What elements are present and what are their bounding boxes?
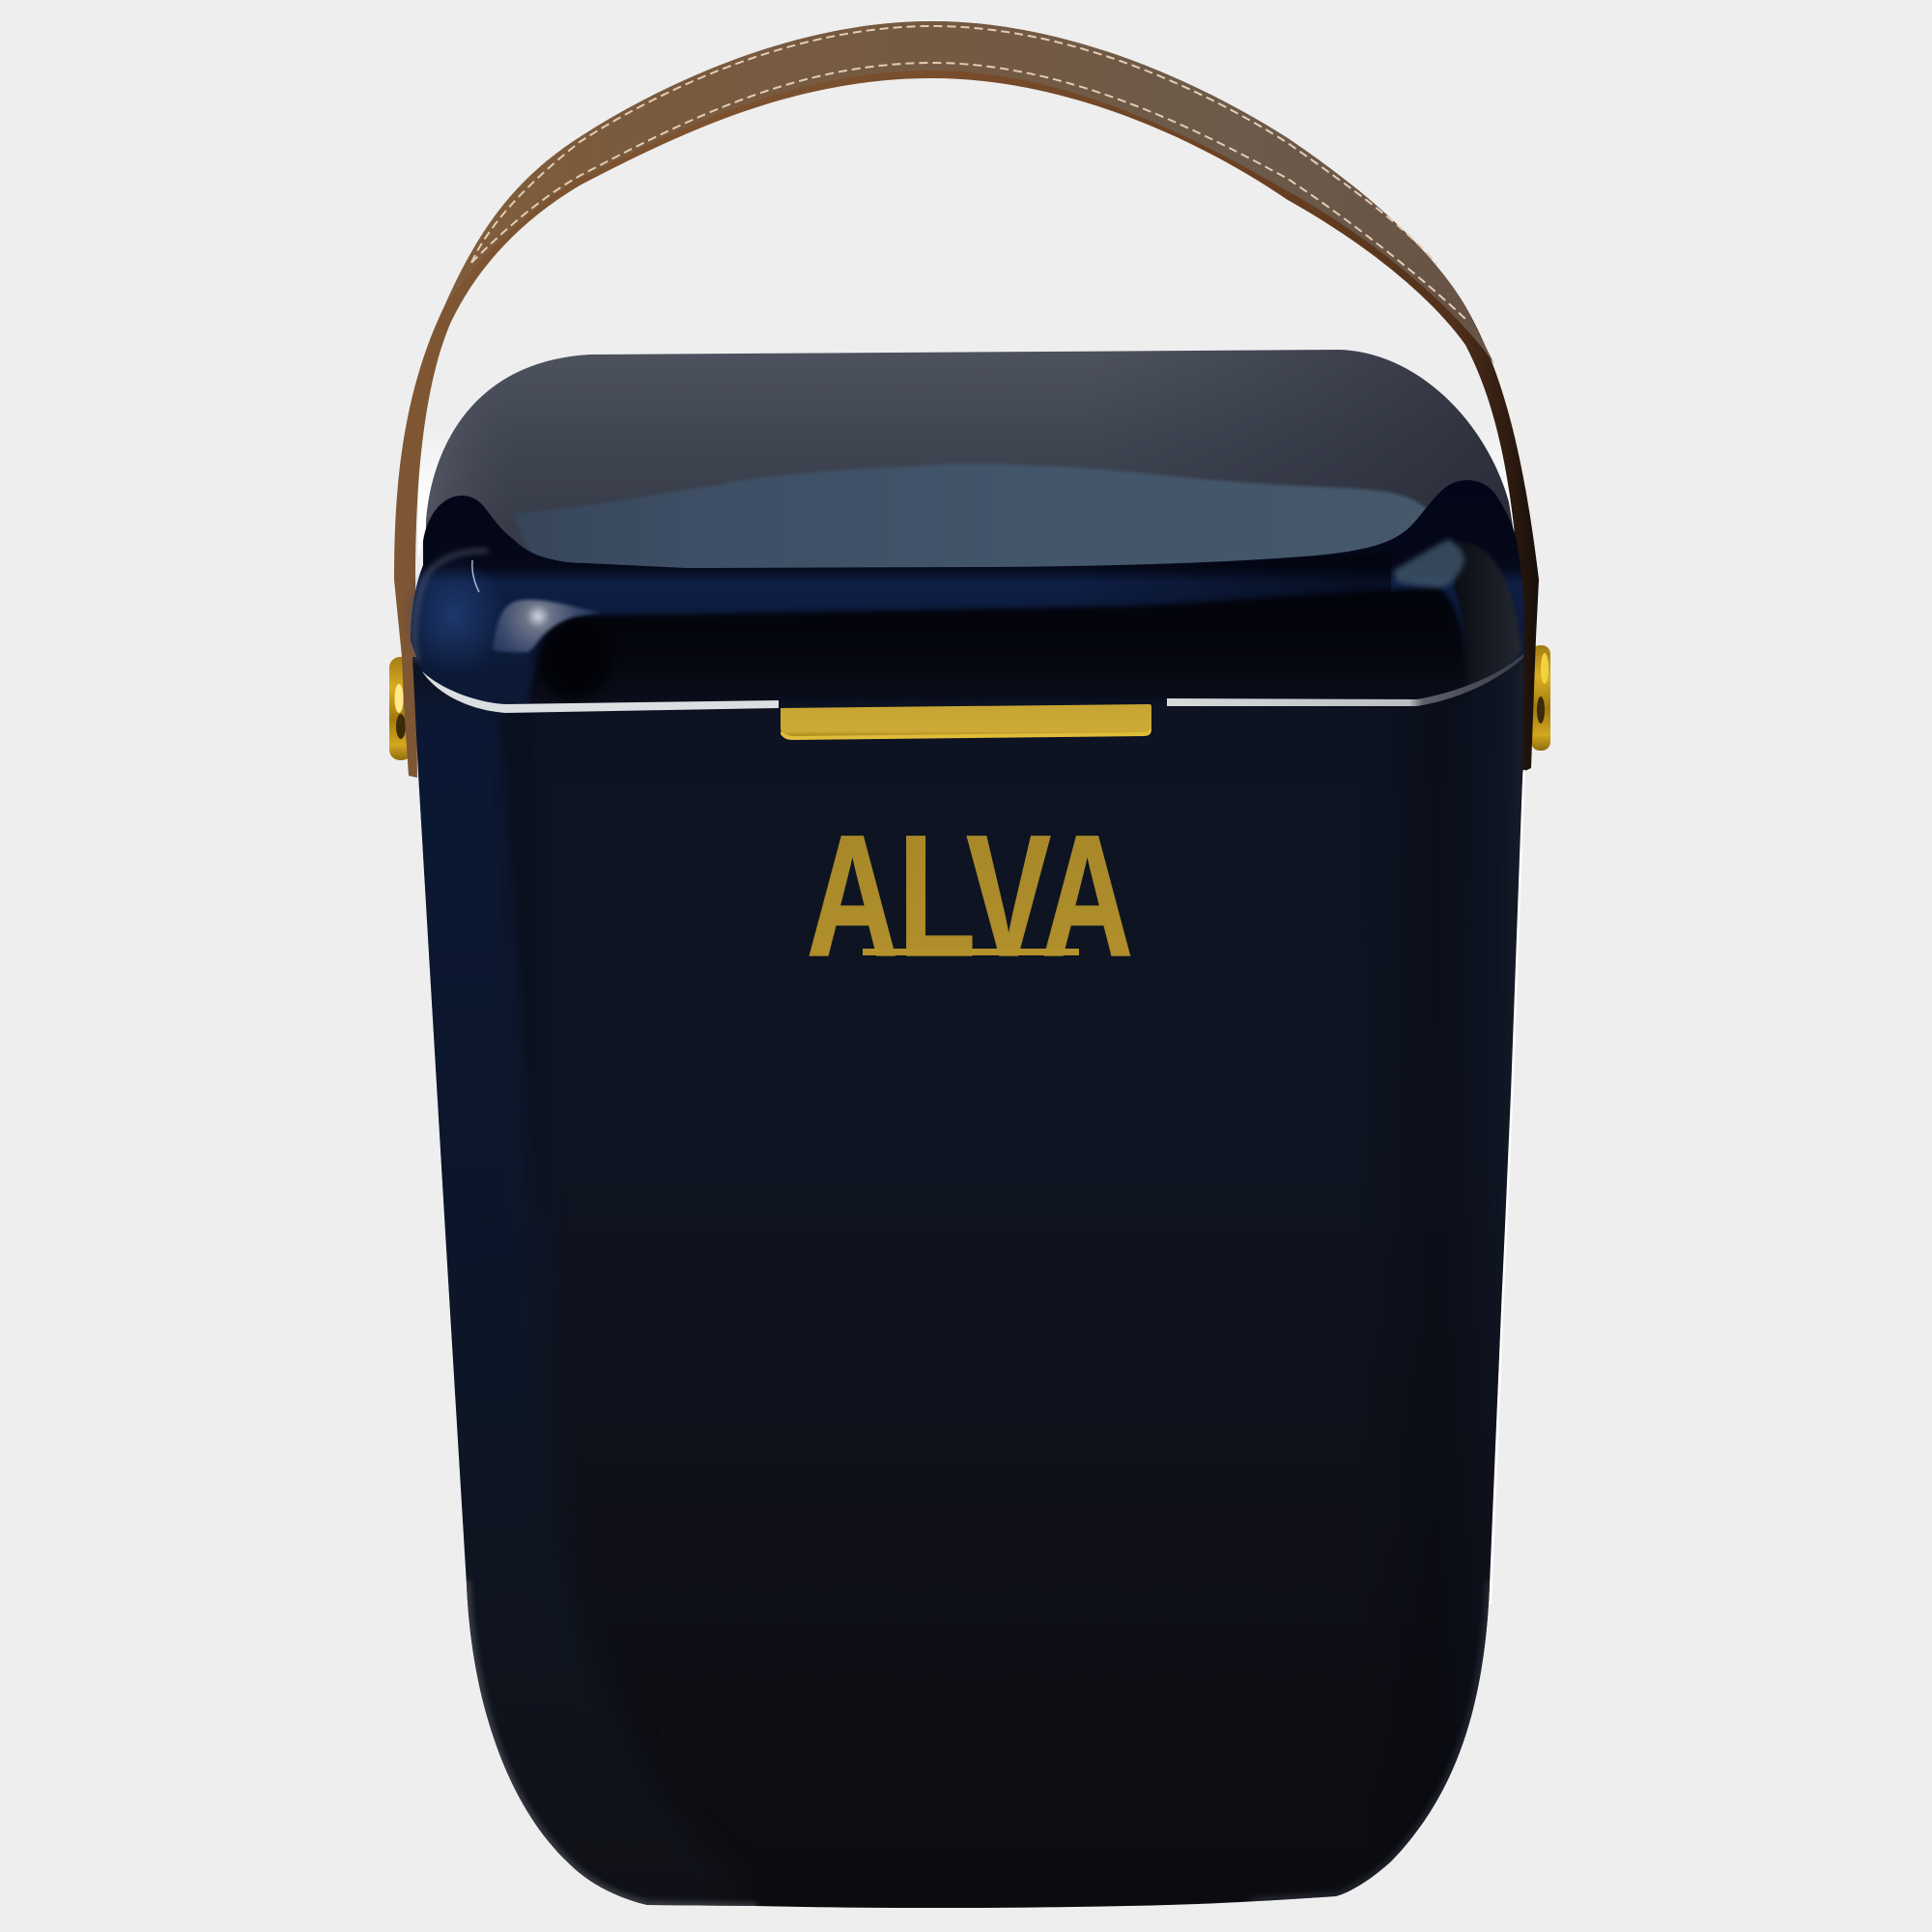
product illustration: ALVA navy cooler: [389, 21, 1550, 1908]
dome light reflection: [512, 464, 1430, 575]
lid dark front face: [528, 587, 1466, 707]
rivet shadow left: [396, 714, 406, 739]
latch underside: [781, 717, 1151, 740]
rivet shadow right: [1537, 696, 1545, 724]
lid seam left: [422, 671, 779, 713]
band right darkening: [1063, 553, 1391, 701]
rivet plate right: [1531, 645, 1550, 751]
lower rim glow: [467, 1584, 753, 1907]
latch plate: [781, 704, 1151, 736]
gap highlight left of lid: [417, 425, 454, 560]
gold latch: [781, 704, 1151, 740]
right corner highlight: [1394, 539, 1464, 587]
handle outer edge highlight: [1476, 319, 1537, 526]
gap highlight right of lid: [1478, 425, 1517, 541]
body base: [406, 638, 1536, 1922]
gold rivet right: [1531, 645, 1550, 751]
leather carrying handle: [394, 21, 1539, 778]
rivet shine right: [1541, 653, 1548, 684]
logo baseline bar: [863, 949, 1079, 955]
logo wordmark: ALVA: [807, 799, 1133, 992]
rivet plate left: [389, 657, 412, 760]
ALVA logo: [807, 799, 1133, 992]
lid face shadow: [538, 614, 611, 699]
lower right rim glow: [1256, 1584, 1490, 1901]
dome side shading: [426, 350, 1521, 580]
dome surface: [426, 350, 1521, 580]
lid scratch mark: [472, 560, 479, 592]
dark strip beside left reflection: [499, 713, 531, 1012]
right side shading: [1403, 647, 1524, 1849]
lid front band with corner horns: [411, 480, 1524, 708]
handle top face: [444, 21, 1494, 364]
inner stitching: [471, 63, 1468, 322]
rivet shine left: [394, 684, 404, 713]
lid left rim sheen: [414, 551, 488, 662]
lid right side panel: [1454, 541, 1521, 690]
lid corner glow: [401, 555, 507, 675]
gold rivet left: [389, 657, 412, 760]
left navy reflection: [414, 696, 713, 1906]
glossy corner highlight: [493, 600, 602, 652]
cooler body: [367, 638, 1536, 1932]
right edge highlight: [1491, 770, 1524, 1604]
lid dome: [426, 350, 1521, 580]
lid seam right: [1167, 654, 1523, 706]
outer stitching: [471, 26, 1436, 264]
handle edge: [394, 21, 1539, 778]
